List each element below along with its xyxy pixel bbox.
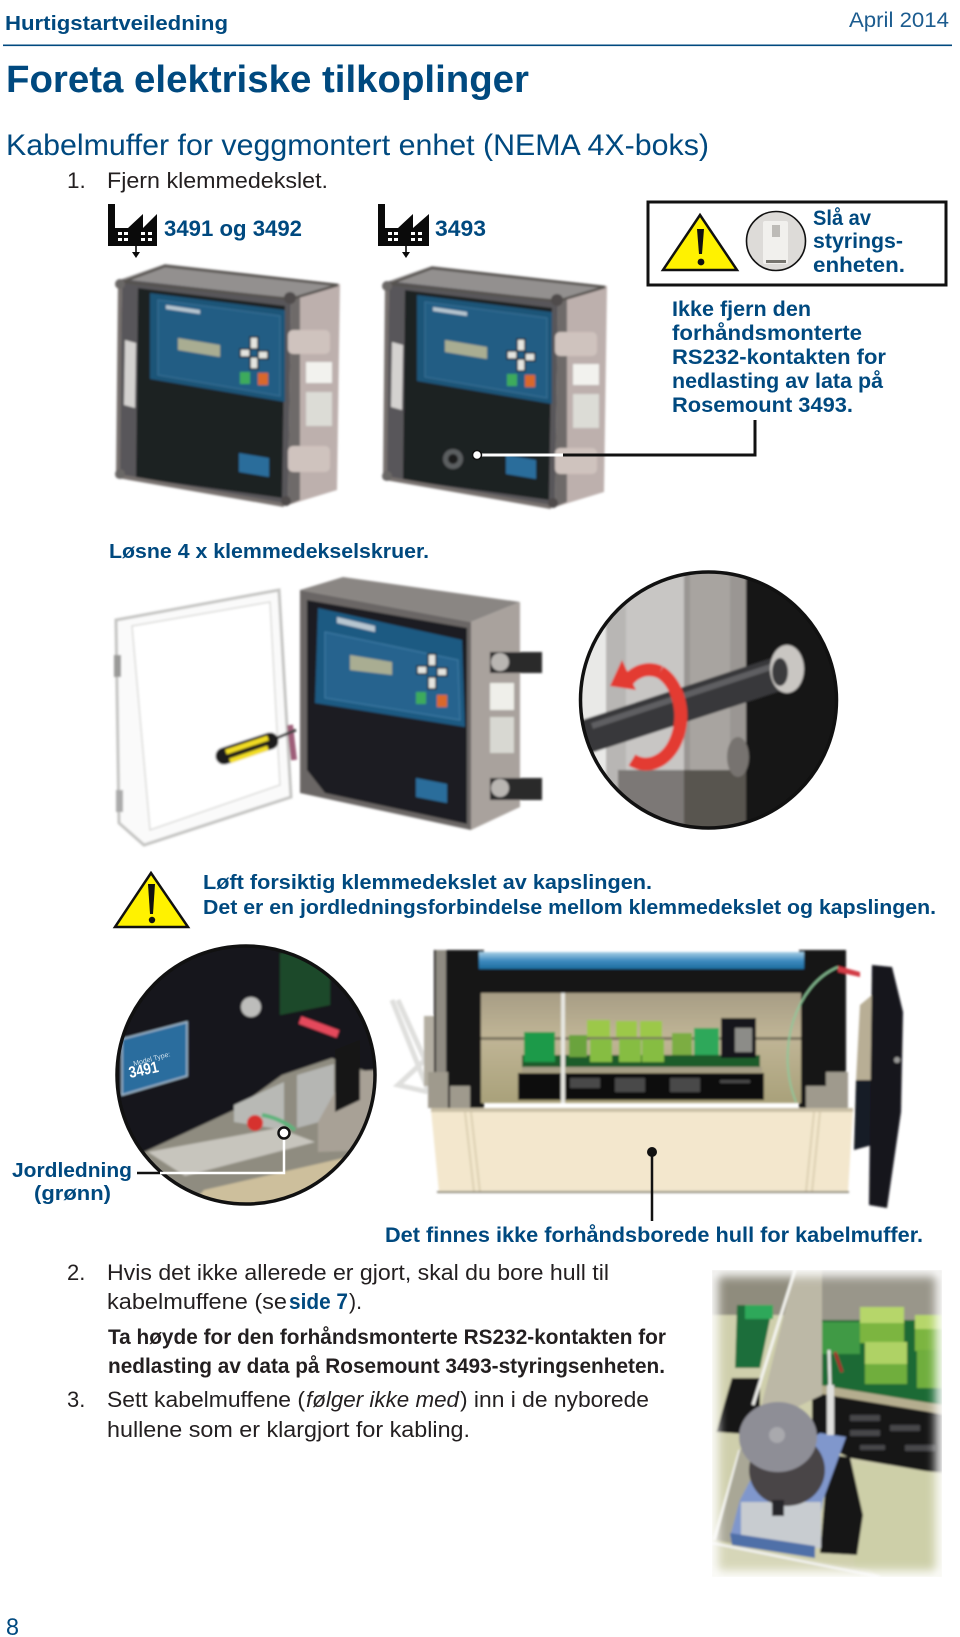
step 2 xyxy=(67,1260,609,1314)
detail circle: ground wire: 3491 xyxy=(127,1059,160,1082)
bold note: RS232 clearance xyxy=(108,1325,667,1378)
step 3 xyxy=(67,1387,649,1442)
model label: 3491 og 3492: 3491 og 3492 xyxy=(164,216,302,241)
warning box: switch off controller: styrings- xyxy=(813,230,903,253)
device illustration: 3493 xyxy=(382,266,607,508)
step 2: Hvis det ikke allerede er gjort, skal du bore hull til xyxy=(107,1260,609,1285)
caution: lift cover carefully xyxy=(115,871,936,927)
step 2: side 7 xyxy=(289,1289,348,1314)
step 3: 3. xyxy=(67,1387,85,1412)
detail circle: ground wire: Model Type: xyxy=(133,1051,171,1068)
subtitle: Kabelmuffer for veggmontert enhet (NEMA 4X-boks) xyxy=(6,129,709,162)
model label: 3493 xyxy=(378,204,486,258)
detail circle: screw with red rotation arrow xyxy=(580,572,838,830)
note: RS232 connector: RS232-kontakten for xyxy=(672,345,887,369)
warning box: switch off controller xyxy=(648,202,946,285)
photo: open enclosure interior xyxy=(392,950,903,1208)
photo: cable gland in enclosure xyxy=(712,1270,942,1577)
warning box: switch off controller: enheten. xyxy=(813,254,905,277)
bold note: RS232 clearance: nedlasting av data på Rosemount 3493-styringsenheten. xyxy=(108,1354,665,1378)
label: ground wire: Jordledning xyxy=(12,1160,132,1182)
label: ground wire: (grønn) xyxy=(34,1183,111,1205)
header: date: April 2014 xyxy=(849,8,949,32)
note: RS232 connector: nedlasting av lata på xyxy=(672,369,884,393)
detail circle: ground wire xyxy=(116,945,376,1206)
model label: 3491 og 3492 xyxy=(108,204,302,258)
leader line: no pre-drilled holes xyxy=(647,1147,657,1221)
note: RS232 connector xyxy=(672,297,887,417)
device illustration: 3491 og 3492 xyxy=(115,264,340,506)
leader line: RS232 xyxy=(472,420,755,460)
leader line: ground wire xyxy=(137,1128,290,1173)
step 2: ). xyxy=(349,1289,362,1314)
note: RS232 connector: forhåndsmonterte xyxy=(672,321,862,345)
label: ground wire xyxy=(12,1160,132,1205)
model label: 3493: 3493 xyxy=(435,216,486,241)
note: RS232 connector: Ikke fjern den xyxy=(672,297,811,321)
step 1: 1. xyxy=(67,168,86,193)
device illustration: open cover with screwdriver xyxy=(114,577,542,845)
step 3: følger ikke med xyxy=(306,1387,460,1412)
note: RS232 connector: Rosemount 3493. xyxy=(672,393,853,417)
caution: lift cover carefully: Løft forsiktig klemmedekslet av kapslingen. xyxy=(203,871,652,894)
header: section name: Hurtigstartveiledning xyxy=(5,12,228,35)
title: Foreta elektriske tilkoplinger xyxy=(6,59,529,101)
instruction: loosen screws: Løsne 4 x klemmedekselskruer. xyxy=(109,540,429,563)
step 2: 2. xyxy=(67,1260,85,1285)
step 2: kabelmuffene (se xyxy=(107,1289,287,1314)
step 3: Sett kabelmuffene ( xyxy=(107,1387,306,1412)
step 3: hullene som er klargjort for kabling. xyxy=(107,1417,470,1442)
caution: lift cover carefully: Det er en jordledningsforbindelse mellom klemmedekslet og kapslingen. xyxy=(203,896,936,919)
warning box: switch off controller: Slå av xyxy=(813,207,871,230)
bold note: RS232 clearance: Ta høyde for den forhåndsmonterte RS232-kontakten for xyxy=(108,1325,667,1349)
caption: no pre-drilled holes: Det finnes ikke forhåndsborede hull for kabelmuffer. xyxy=(385,1224,923,1247)
step 1: Fjern klemmedekslet. xyxy=(107,168,328,193)
step 3: ) inn i de nyborede xyxy=(460,1387,649,1412)
